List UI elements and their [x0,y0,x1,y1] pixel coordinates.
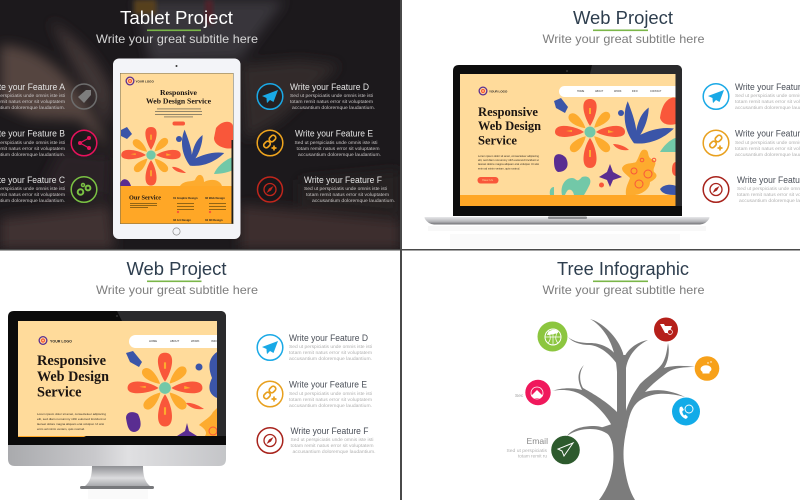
tablet device: 04 3D Design [205,218,223,222]
node: cart [654,318,678,342]
tablet device: Our Service [129,194,161,202]
laptop device: Service [478,132,517,148]
feature D [257,333,372,362]
laptop device: Web Design [478,118,542,133]
tree [552,319,695,500]
laptop device: laoreet dolore magna aliquam erat volutpat. Ut wisi [478,162,539,166]
laptop device: CONTACT [650,90,662,93]
feature A [0,82,96,111]
feature D [257,82,375,111]
node: phone [672,398,700,426]
feature E [257,380,372,409]
feature B [0,128,97,158]
subtitle: Write your great subtitle here [542,32,705,46]
feature E: totam remit natus error sit voluptatem [296,146,380,152]
laptop device: YOUR LOGO [489,90,508,94]
tablet device: Web Design Service [146,96,212,106]
feature E: Write your Feature E [295,128,373,138]
laptop device: Responsive [478,104,538,119]
title underline [593,280,648,282]
feature F: Write your Feature F [304,175,382,185]
laptop device [424,65,710,224]
feature F: Sed ut perspiciatis unde omnis iste isti [290,437,374,443]
tablet device: 01 Graphic Design [173,196,198,200]
feature F: accusantium doloremque laudantium. [312,198,395,204]
node: globe [538,322,568,352]
feature F [258,175,395,204]
title underline [593,30,648,31]
node: piggy bank [695,356,719,381]
feature E: Sed ut perspiciatis unde omnis iste isti [294,140,378,146]
feature E [257,128,381,158]
title underline [147,30,201,31]
desktop monitor: elit, sed diam nonummy nibh euismod tincidunt ut [37,417,106,421]
feature F [257,426,376,455]
desktop monitor: Responsive [37,353,106,369]
tablet device: 03 Art Design [173,218,191,222]
feature E: Sed ut perspiciatis unde omnis iste isti [289,391,372,397]
desktop monitor: enim ad minim veniam, quis nostrud. [37,427,85,431]
node: email: Sed ut perspiciatis [506,448,548,453]
desktop monitor: ABOUT [170,339,180,343]
title underline [147,280,202,282]
panel: tablet project [0,0,400,249]
feature E: Write your Feature E [289,380,367,390]
laptop device: HOME [577,90,585,93]
feature E: accusantium doloremque laudantium. [289,403,372,409]
desktop monitor: Lorem ipsum dolor sit amet, consectetuer adipiscing [37,412,106,416]
feature D: Write your Feature D [289,333,368,343]
node: email: Email [526,436,548,446]
subtitle: Write your great subtitle here [96,32,258,46]
laptop device: ABOUT [595,90,604,93]
feature E [703,128,800,158]
title: Web Project [126,259,226,279]
laptop device: enim ad minim veniam, quis nostrud. [478,166,520,170]
feature F: totam remit natus error sit voluptatem [290,443,374,449]
tablet device [113,58,240,239]
feature D: Sed ut perspiciatis unde omnis iste isti [289,344,372,350]
feature F: Sed ut perspiciatis unde omnis iste isti [304,186,387,192]
feature D: accusantium doloremque laudantium. [289,356,372,362]
feature D: accusantium doloremque laudantium. [292,105,375,111]
desktop monitor: HOME [149,339,157,343]
panel: web project desktop [8,259,376,499]
node: email [506,436,580,464]
laptop device: WORK [614,90,622,93]
feature F [703,175,800,204]
feature F: totam remit natus error sit voluptatem [306,192,389,198]
feature E: totam remit natus error sit voluptatem [289,397,372,403]
node: sec: Sec [515,393,524,399]
title: Tree Infographic [557,259,689,279]
feature D: totam remit natus error sit voluptatem [289,350,372,356]
desktop monitor: Service [37,384,82,400]
tablet device: YOUR LOGO [136,80,155,84]
feature D: totam remit natus error sit voluptatem [290,99,373,105]
tablet device: Responsive [160,88,198,97]
subtitle: Write your great subtitle here [96,283,258,297]
desktop monitor: laoreet dolore magna aliquam erat volutpat. Ut wisi [37,422,104,426]
node: sec [515,380,551,405]
tablet device: 02 Web Design [205,196,225,200]
feature F: Write your Feature F [290,426,369,436]
laptop device: View Us [482,178,493,182]
title: Tablet Project [120,8,233,28]
title: Web Project [573,8,673,28]
desktop monitor: WORK [191,339,200,343]
panel: tree infographic [506,259,719,500]
feature D: Write your Feature D [290,82,369,92]
desktop monitor [8,311,226,489]
feature E: accusantium doloremque laudantium. [298,152,381,158]
feature D: Sed ut perspiciatis unde omnis iste isti [290,93,373,99]
photo background [0,0,400,249]
feature D [703,82,800,111]
desktop monitor: INFO [211,339,217,343]
subtitle: Write your great subtitle here [542,283,705,297]
feature F: accusantium doloremque laudantium. [292,449,376,455]
node: email: totam remit ru [518,454,547,458]
laptop device: INFO [632,90,638,93]
feature C [0,175,97,204]
laptop device: elit, sed diam nonummy nibh euismod tincidunt ut [478,158,539,162]
laptop device: Lorem ipsum dolor sit amet, consectetuer adipiscing [478,154,540,158]
desktop monitor: Web Design [37,369,110,385]
panel: web project laptop [424,10,800,224]
desktop monitor: YOUR LOGO [50,340,72,344]
